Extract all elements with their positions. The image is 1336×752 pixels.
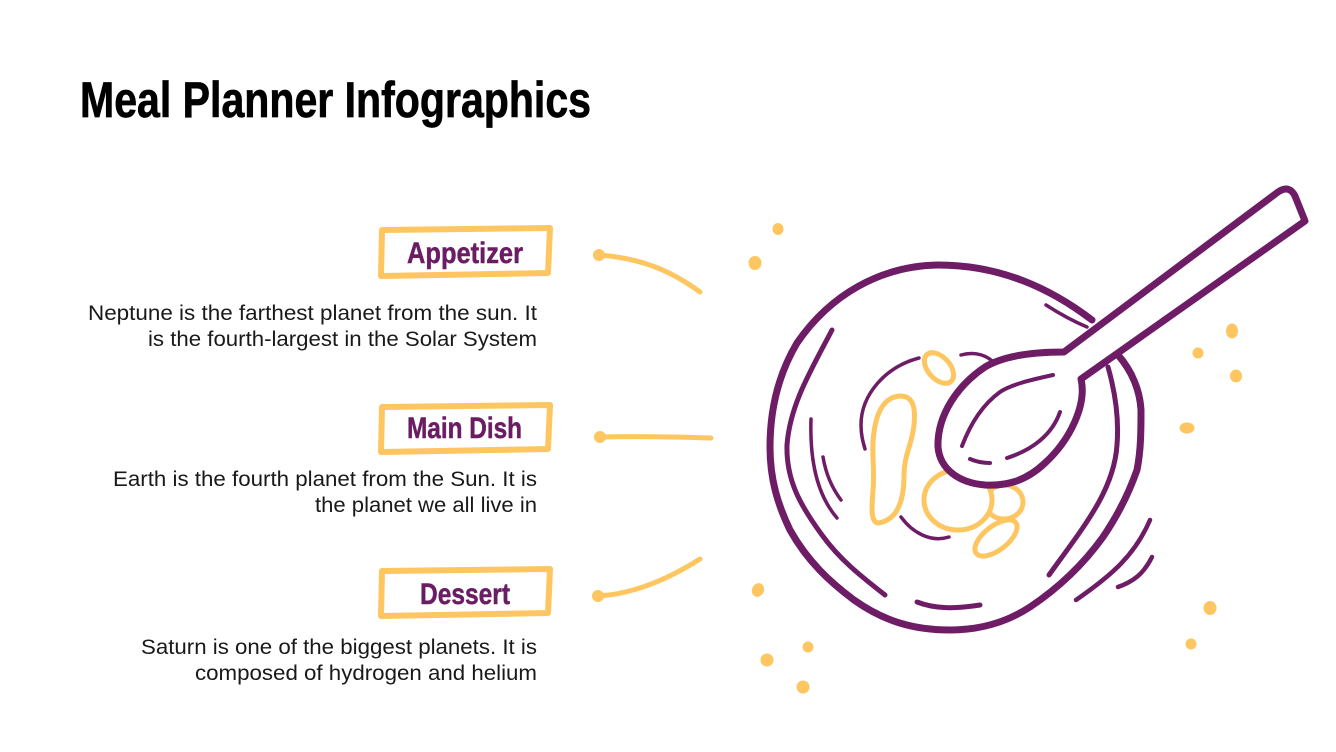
dessert label box — [381, 569, 550, 616]
main dish description: the planet we all live in — [315, 494, 537, 517]
dessert description — [141, 636, 537, 685]
arrow: appetizer connector — [593, 249, 700, 292]
illustration: bowl with spoon — [748, 189, 1305, 694]
panel: main dish — [113, 405, 550, 517]
motion lines — [1076, 520, 1152, 600]
food: purple arcs — [861, 353, 996, 539]
title: Meal Planner Infographics — [80, 72, 591, 128]
bowl rim — [770, 265, 1141, 630]
appetizer description: is the fourth-largest in the Solar System — [148, 328, 537, 351]
appetizer label box — [381, 228, 550, 276]
arrow: main dish connector — [594, 431, 711, 443]
panel: dessert — [141, 569, 550, 685]
dessert description: composed of hydrogen and helium — [195, 662, 537, 685]
dessert description: Saturn is one of the biggest planets. It is — [141, 636, 537, 659]
appetizer heading: Appetizer — [407, 237, 523, 270]
main dish description — [113, 468, 537, 517]
main dish description: Earth is the fourth planet from the Sun. It is — [113, 468, 537, 491]
appetizer description: Neptune is the farthest planet from the sun. It — [88, 302, 537, 325]
appetizer description — [88, 302, 537, 351]
dessert heading: Dessert — [420, 578, 510, 611]
arrow: dessert connector — [592, 559, 700, 602]
decorative dots — [748, 223, 1242, 694]
panel: appetizer — [88, 228, 550, 351]
main dish label box — [381, 405, 550, 452]
spoon — [938, 189, 1305, 485]
food: yellow shapes — [872, 347, 1023, 563]
main dish heading: Main Dish — [407, 412, 522, 445]
